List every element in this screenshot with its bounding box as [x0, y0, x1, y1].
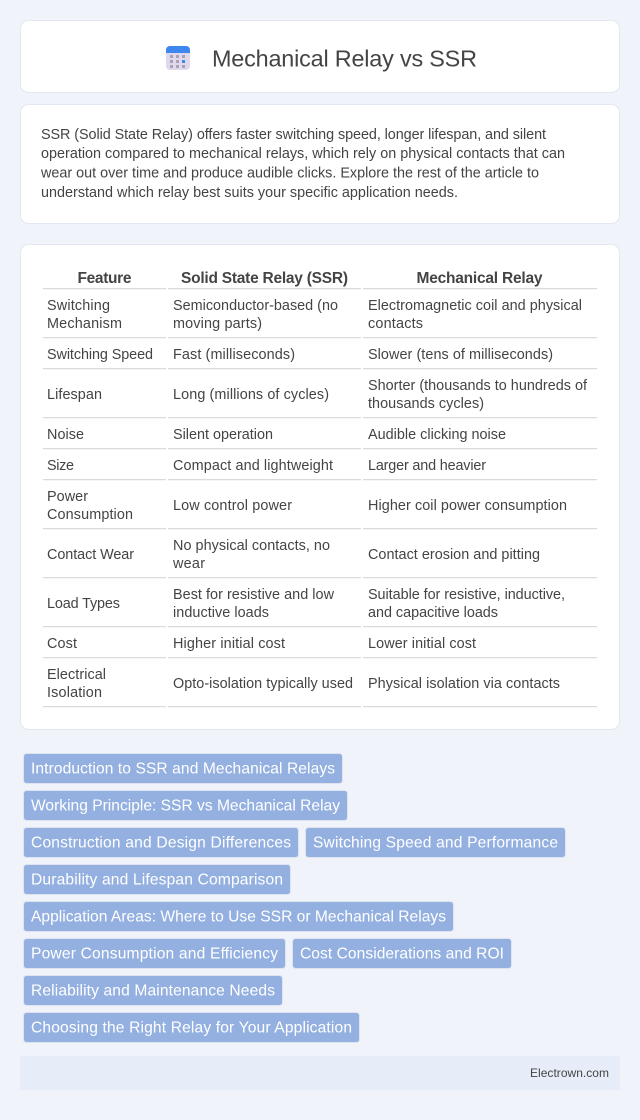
- row: cost: Cost: [47, 636, 77, 652]
- row: power consumption: Power: [47, 489, 88, 505]
- row: switching mechanism: moving parts): [173, 316, 262, 332]
- topic tags: Reliability and Maintenance Needs: [31, 982, 275, 1000]
- row: load types: and capacitive loads: [368, 605, 498, 621]
- row: power consumption: Low control power: [173, 498, 292, 514]
- row: power consumption: Consumption: [47, 507, 133, 523]
- row: lifespan: [47, 378, 588, 412]
- row: switching mechanism: Semiconductor-based (no: [173, 298, 338, 314]
- row: noise: Noise: [47, 427, 84, 443]
- topic tags: Construction and Design Differences: [31, 834, 291, 852]
- row: switching mechanism: contacts: [368, 316, 423, 332]
- intro panel: [20, 104, 620, 224]
- intro text: [40, 127, 565, 201]
- row: electrical isolation: [47, 667, 560, 701]
- row: switching speed: Slower (tens of milliseconds): [368, 347, 553, 363]
- row: cost: Higher initial cost: [173, 636, 285, 652]
- row: size: Larger and heavier: [368, 458, 486, 474]
- table header: Mechanical Relay: [416, 270, 543, 287]
- intro text: operation compared to mechanical relays, which rely on physical contacts that can: [41, 146, 565, 162]
- icon: calendar: [166, 46, 190, 70]
- row: electrical isolation: Opto-isolation typically used: [173, 676, 353, 692]
- row: cost: [47, 636, 476, 652]
- table header: Solid State Relay (SSR): [181, 270, 348, 287]
- table header: [78, 270, 543, 287]
- row: size: [47, 458, 486, 474]
- row: switching mechanism: [47, 298, 582, 332]
- title: Mechanical Relay vs SSR: [212, 46, 477, 72]
- row: power consumption: [47, 489, 567, 523]
- row: size: Compact and lightweight: [173, 458, 333, 474]
- row: load types: Load Types: [47, 596, 120, 612]
- topic tags: [24, 754, 566, 1042]
- intro text: understand which relay best suits your specific application needs.: [41, 185, 458, 201]
- row: lifespan: Long (millions of cycles): [173, 387, 329, 403]
- row: cost: Lower initial cost: [368, 636, 476, 652]
- row: load types: [47, 587, 565, 621]
- footer credit: Electrown.com: [530, 1066, 609, 1080]
- topic tags: Durability and Lifespan Comparison: [31, 872, 283, 888]
- row: power consumption: Higher coil power consumption: [368, 498, 567, 514]
- topic tags: Application Areas: Where to Use SSR or Mechanical Relays: [31, 908, 446, 926]
- topic tags: Working Principle: SSR vs Mechanical Relay: [31, 798, 340, 814]
- topic tags: Choosing the Right Relay for Your Application: [31, 1020, 352, 1036]
- topic tags: Power Consumption and Efficiency: [31, 946, 278, 962]
- row: noise: Audible clicking noise: [368, 427, 506, 443]
- row: switching speed: Fast (milliseconds): [173, 347, 295, 363]
- table header: Feature: [78, 270, 132, 287]
- row: contact wear: Contact erosion and pitting: [368, 547, 540, 563]
- topic tags: Switching Speed and Performance: [313, 834, 558, 852]
- row: switching speed: [47, 347, 553, 363]
- row: contact wear: [47, 538, 540, 572]
- footer: [20, 1056, 620, 1090]
- row: contact wear: wear: [172, 556, 205, 572]
- row: load types: Suitable for resistive, inductive,: [368, 587, 565, 603]
- topic tags: Cost Considerations and ROI: [300, 946, 504, 962]
- row: noise: [47, 427, 506, 443]
- comparison table panel: [20, 244, 620, 730]
- row: electrical isolation: Electrical: [47, 667, 106, 683]
- row: electrical isolation: Isolation: [47, 685, 102, 701]
- row: lifespan: Shorter (thousands to hundreds of: [368, 378, 588, 394]
- row: electrical isolation: Physical isolation via contacts: [368, 676, 560, 692]
- header panel: [20, 20, 620, 92]
- row: lifespan: thousands cycles): [368, 396, 484, 412]
- row: contact wear: No physical contacts, no: [173, 538, 330, 554]
- row: lifespan: Lifespan: [47, 387, 102, 403]
- row: size: Size: [47, 458, 74, 474]
- row: load types: Best for resistive and low: [173, 587, 335, 603]
- row: switching mechanism: Mechanism: [47, 316, 122, 332]
- intro text: wear out over time and produce audible clicks. Explore the rest of the article to: [40, 165, 539, 181]
- topic tags: Introduction to SSR and Mechanical Relays: [31, 760, 335, 778]
- row: switching speed: Switching Speed: [47, 347, 153, 363]
- row: switching mechanism: Electromagnetic coil and physical: [368, 298, 582, 314]
- intro text: SSR (Solid State Relay) offers faster switching speed, longer lifespan, and silent: [41, 127, 546, 143]
- row: switching mechanism: Switching: [47, 298, 110, 314]
- row: load types: inductive loads: [173, 605, 269, 621]
- row: contact wear: Contact Wear: [47, 547, 134, 563]
- row: noise: Silent operation: [173, 427, 273, 443]
